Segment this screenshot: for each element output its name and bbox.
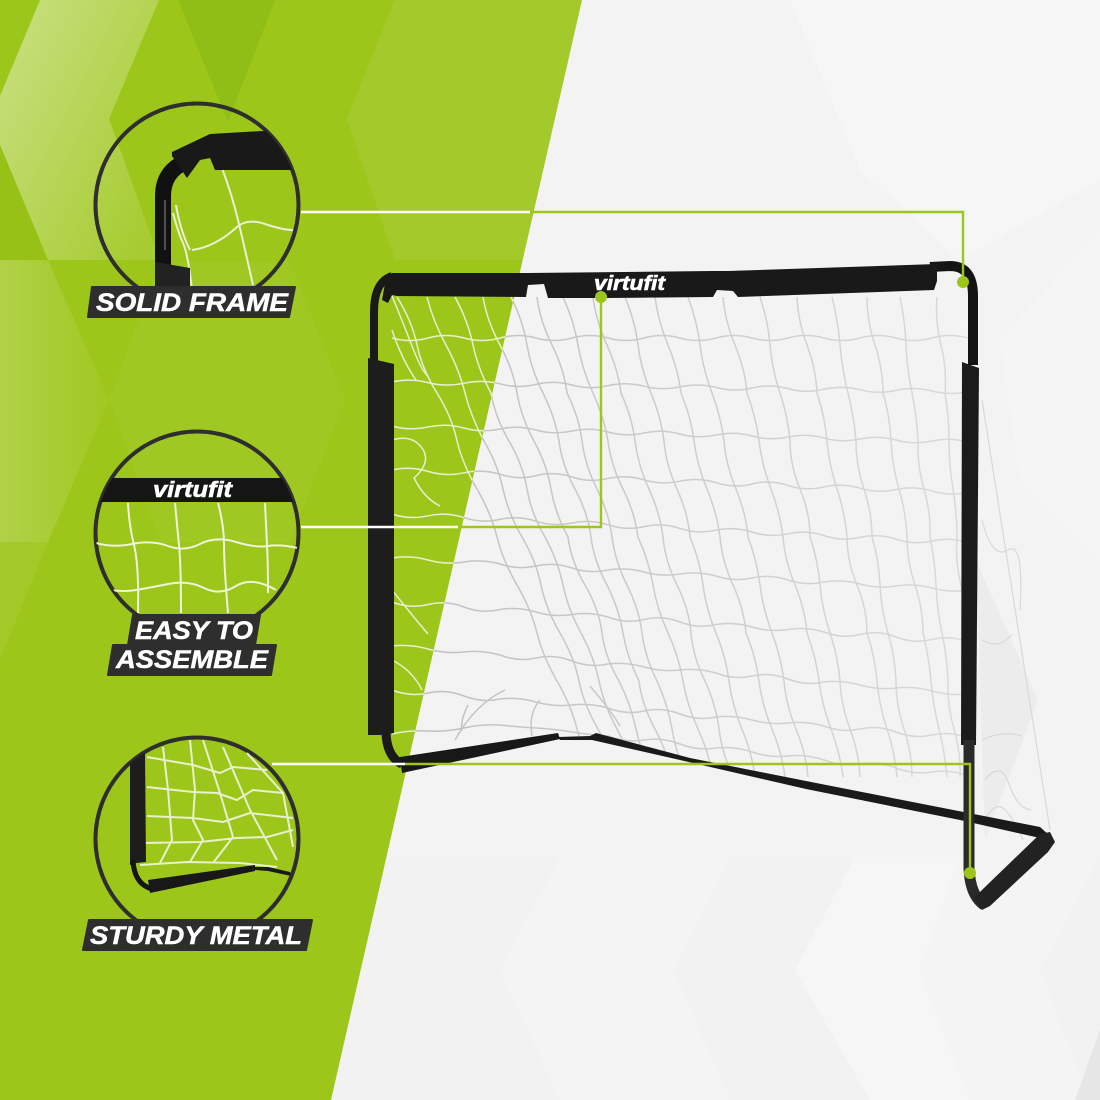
panel: sturdy metal detail <box>96 738 298 940</box>
net detail <box>173 168 293 290</box>
goal net <box>391 296 968 777</box>
right post lower <box>969 740 984 905</box>
circle ring <box>96 432 298 634</box>
label: sturdy metal: STURDY METAL <box>90 922 302 950</box>
bottom left sleeve <box>400 733 560 773</box>
side net shading <box>976 400 1050 840</box>
vertical sleeve <box>130 752 146 865</box>
circle ring <box>96 738 298 940</box>
callout line: solid frame <box>301 212 969 288</box>
label: easy to assemble: EASY TO <box>135 617 254 645</box>
goal frame <box>368 264 1055 910</box>
left post sleeve <box>368 358 394 735</box>
bottom sleeve <box>148 865 255 893</box>
corner pipe <box>133 860 152 889</box>
right post sleeve <box>961 362 979 745</box>
bottom bar <box>558 733 1050 838</box>
right corner pipe <box>930 266 973 365</box>
background: green diagonal panel <box>0 0 600 1100</box>
foot sleeve <box>974 832 1055 910</box>
net over green <box>391 296 514 735</box>
label: solid frame: SOLID FRAME <box>96 289 289 317</box>
pipe <box>163 162 185 295</box>
label: easy to assemble <box>108 615 276 675</box>
logo band <box>101 478 293 502</box>
net detail <box>96 503 298 613</box>
circle ring <box>96 104 298 306</box>
net detail <box>140 740 293 867</box>
bottom left corner <box>386 733 402 764</box>
logo band: virtufit <box>153 477 234 502</box>
top sleeve with logo: virtufit <box>594 273 667 295</box>
left corner pipe <box>374 276 392 362</box>
callout line: easy to assemble <box>301 291 607 527</box>
label: easy to assemble: ASSEMBLE <box>115 646 269 674</box>
panel: solid frame detail <box>96 104 298 306</box>
top sleeve with logo <box>382 264 937 303</box>
bottom bar <box>255 867 291 876</box>
net over light panel <box>415 297 968 777</box>
sleeves <box>172 131 298 178</box>
callout line: sturdy metal <box>272 764 976 879</box>
panel: easy to assemble detail <box>94 430 300 614</box>
